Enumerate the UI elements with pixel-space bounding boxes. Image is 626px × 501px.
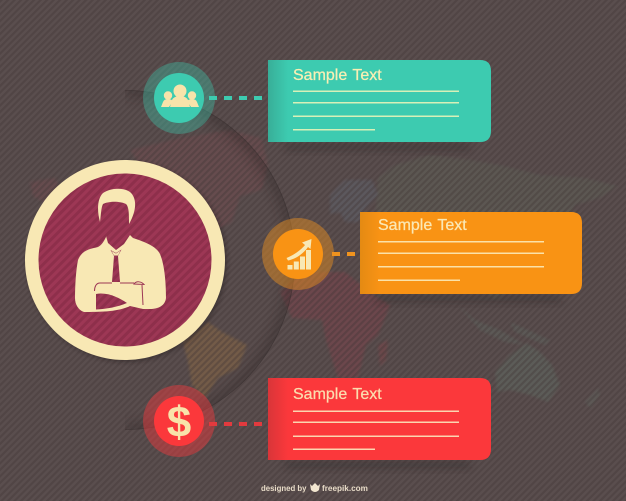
arc shadow <box>125 90 295 430</box>
panel: orange card <box>360 212 582 302</box>
map: south america <box>183 322 247 398</box>
map: europe <box>330 180 378 222</box>
heading: Sample Text <box>293 386 382 403</box>
text lines <box>378 241 544 281</box>
heading: Sample Text <box>293 67 382 84</box>
map: africa <box>280 272 390 378</box>
panel: red card <box>268 378 491 468</box>
icon: team badge <box>143 62 215 134</box>
footer credit <box>261 483 368 493</box>
connector: orange dashes <box>332 252 355 256</box>
panel: teal card <box>268 60 491 150</box>
heading: Sample Text <box>378 217 467 234</box>
central portrait badge <box>25 160 227 362</box>
connector: red dashes <box>209 422 262 426</box>
world map <box>30 130 618 408</box>
text lines <box>293 410 459 450</box>
footer credit: freepik.com <box>322 484 368 493</box>
icon: dollar badge <box>143 385 215 457</box>
icon: businessman silhouette <box>75 189 166 312</box>
connector: teal dashes <box>209 96 262 100</box>
map: asia <box>372 155 618 300</box>
map: north america <box>30 130 268 232</box>
footer credit: designed by <box>261 484 307 493</box>
map: australia <box>495 343 560 402</box>
icon: dollar badge: $ <box>167 398 191 447</box>
icon: growth chart badge <box>262 218 334 290</box>
text lines <box>293 90 459 130</box>
icon: crown logo <box>310 483 320 492</box>
map: indonesia <box>458 305 550 345</box>
